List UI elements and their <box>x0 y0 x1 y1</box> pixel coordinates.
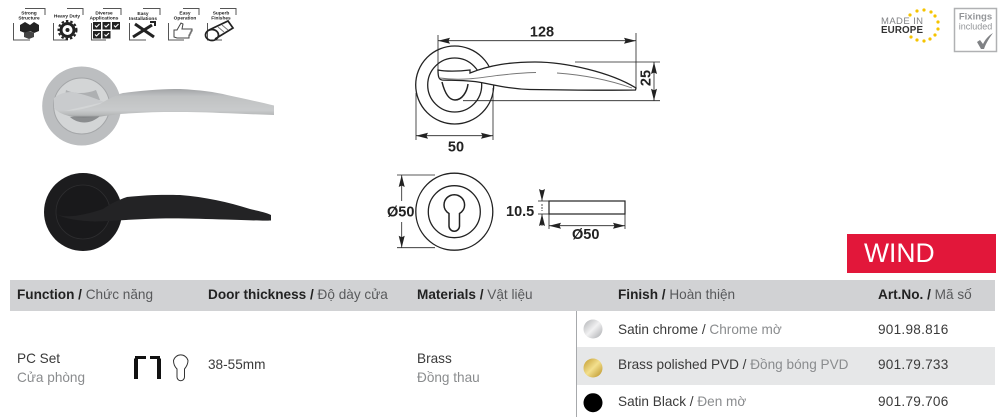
header: door thickness: Door thickness / Độ dày cửa <box>208 287 388 302</box>
product photo: satin chrome handle <box>42 66 274 146</box>
highlighted row background <box>577 347 995 385</box>
badge: made in Europe: EUROPE <box>881 25 923 36</box>
icon: tools <box>133 22 155 37</box>
materials value: Brass <box>417 351 452 366</box>
header: function: Function / Chức năng <box>17 287 153 302</box>
door thickness value: 38-55mm <box>208 357 265 372</box>
icon: cylinder finish <box>206 21 233 40</box>
dimension 25: 25 <box>638 70 654 86</box>
title banner: WIND: WIND <box>864 238 935 268</box>
badge: fixings included: included <box>959 22 992 32</box>
icon: checkboxes <box>93 22 120 38</box>
technical drawing: handle side view with dimensions <box>415 24 660 156</box>
dimension diameter 50 right: Ø50 <box>572 227 599 243</box>
finish row 3: Satin Black / Đen mờ <box>618 394 746 409</box>
certification icons row: Strong <box>21 10 37 16</box>
header: materials: Materials / Vật liệu <box>417 287 533 302</box>
badge: fixings included: Fixings <box>959 12 992 22</box>
article number 3: 901.79.706 <box>878 394 949 409</box>
materials value <box>417 351 480 385</box>
badge: made in Europe: MADE IN <box>881 16 923 27</box>
product photo: satin black handle <box>44 173 271 251</box>
header: article number: Art.No. / Mã số <box>878 287 972 302</box>
certification icons row: Finishes <box>211 16 231 22</box>
function icons: lever and cylinder <box>134 354 188 382</box>
badge: made in Europe <box>881 8 940 43</box>
finish swatches <box>584 320 602 412</box>
certification icons row: Easy <box>137 11 149 17</box>
article number 2: 901.79.733 <box>878 357 949 372</box>
icon: cubes <box>20 22 39 39</box>
dimension 10.5: 10.5 <box>506 204 534 220</box>
finish row 1: Satin chrome / Chrome mờ <box>618 322 782 337</box>
function text <box>17 351 85 385</box>
table header bar <box>10 280 995 311</box>
technical drawing: rose front view and side profile <box>387 172 626 251</box>
dimension 50: 50 <box>448 140 464 156</box>
certification icons row: Easy <box>179 10 191 16</box>
icon: gear <box>58 21 76 39</box>
dimension diameter 50 left: Ø50 <box>387 204 414 220</box>
title banner: WIND <box>847 234 996 273</box>
function text: Cửa phòng <box>17 370 85 385</box>
certification icons row <box>13 8 236 42</box>
finish row 2: Brass polished PVD / Đồng bóng PVD <box>618 357 848 372</box>
materials value: Đồng thau <box>417 370 480 385</box>
certification icons row: Heavy Duty <box>54 14 80 20</box>
icon: thumbs up <box>174 23 192 38</box>
article number 1: 901.98.816 <box>878 322 949 337</box>
certification icons row: Structure <box>18 16 40 22</box>
certification icons row: Diverse <box>95 10 113 16</box>
header: finish: Finish / Hoàn thiện <box>618 287 735 302</box>
certification icons row: Applications <box>90 16 119 22</box>
function text: PC Set <box>17 351 60 366</box>
certification icons row: Operation <box>174 16 196 22</box>
badge: fixings included <box>954 8 998 52</box>
certification icons row: Superb <box>213 10 229 16</box>
dimension 128: 128 <box>530 24 554 40</box>
certification icons row: Installations <box>129 16 157 22</box>
